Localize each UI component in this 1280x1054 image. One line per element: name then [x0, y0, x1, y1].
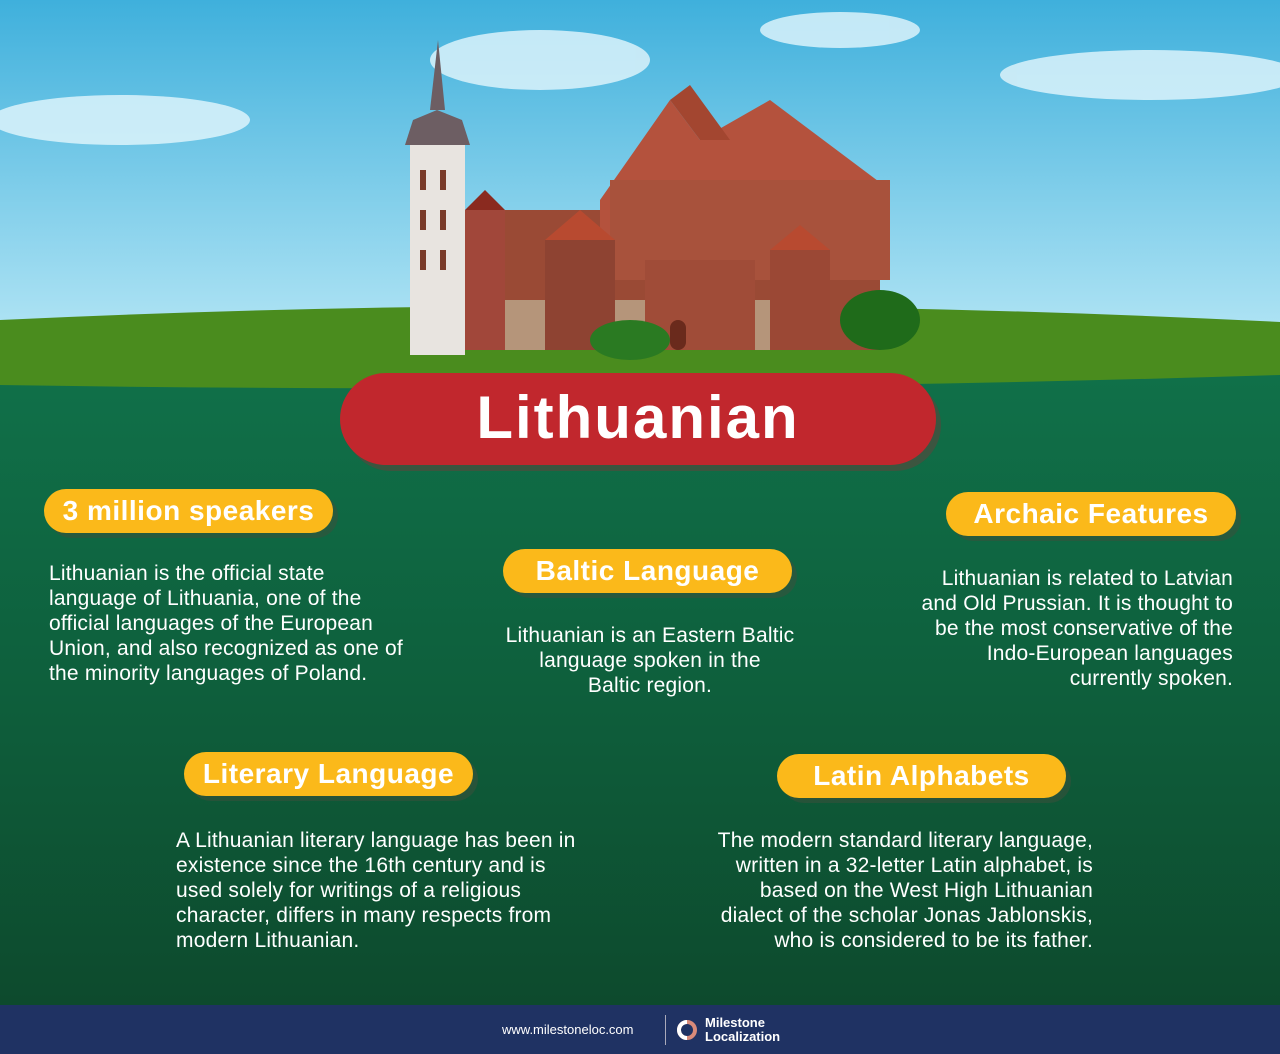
footer url: www.milestoneloc.com — [502, 1022, 634, 1037]
pill: Latin Alphabets: Latin Alphabets — [813, 760, 1030, 791]
logo text: Localization — [705, 1029, 780, 1044]
text: latin: The modern standard literary language, — [718, 829, 1093, 852]
text: archaic: and Old Prussian. It is thought to — [922, 592, 1233, 615]
pill: Literary Language: Literary Language — [203, 758, 454, 789]
icon: logo ring — [677, 1020, 697, 1040]
pill: Baltic Language — [503, 549, 792, 593]
logo text — [705, 1015, 780, 1044]
text: latin: who is considered to be its father. — [774, 929, 1093, 952]
text: latin: written in a 32-letter Latin alphabet, is — [736, 854, 1093, 877]
text: literary: character, differs in many respects from — [176, 904, 551, 927]
text: archaic: currently spoken. — [1070, 667, 1233, 690]
text: latin: based on the West High Lithuanian — [760, 879, 1093, 902]
text: literary — [176, 829, 576, 952]
text: literary: A Lithuanian literary language has been in — [176, 829, 576, 852]
text: literary: used solely for writings of a religious — [176, 879, 521, 902]
text: literary: modern Lithuanian. — [176, 929, 359, 952]
pill: Archaic Features — [946, 492, 1236, 536]
text: speakers: language of Lithuania, one of the — [49, 587, 362, 610]
text: archaic: Indo-European languages — [987, 642, 1233, 665]
text: speakers — [49, 562, 403, 685]
pill: Literary Language — [184, 752, 473, 796]
text: literary: existence since the 16th century and is — [176, 854, 546, 877]
pill: Latin Alphabets — [777, 754, 1066, 798]
illustration: castle — [405, 40, 920, 360]
text: baltic: language spoken in the — [539, 649, 761, 672]
text: archaic — [922, 567, 1233, 690]
text: baltic: Lithuanian is an Eastern Baltic — [506, 624, 794, 647]
title banner — [340, 373, 936, 465]
pill: Archaic Features: Archaic Features — [973, 498, 1209, 529]
text: speakers: Lithuanian is the official state — [49, 562, 325, 585]
text: speakers: the minority languages of Poland. — [49, 662, 367, 685]
text: baltic — [506, 624, 794, 697]
footer — [0, 1005, 1280, 1054]
text: latin — [718, 829, 1093, 952]
pill: 3 million speakers — [44, 489, 333, 533]
logo text: Milestone — [705, 1015, 765, 1030]
text: speakers: official languages of the European — [49, 612, 373, 635]
text: latin: dialect of the scholar Jonas Jablonskis, — [721, 904, 1093, 927]
text: speakers: Union, and also recognized as one of — [49, 637, 403, 660]
pill: 3 million speakers: 3 million speakers — [63, 495, 314, 526]
text: archaic: Lithuanian is related to Latvian — [942, 567, 1233, 590]
pill: Baltic Language: Baltic Language — [536, 555, 759, 586]
text: baltic: Baltic region. — [588, 674, 712, 697]
text: archaic: be the most conservative of the — [935, 617, 1233, 640]
title banner: Lithuanian — [476, 384, 800, 451]
